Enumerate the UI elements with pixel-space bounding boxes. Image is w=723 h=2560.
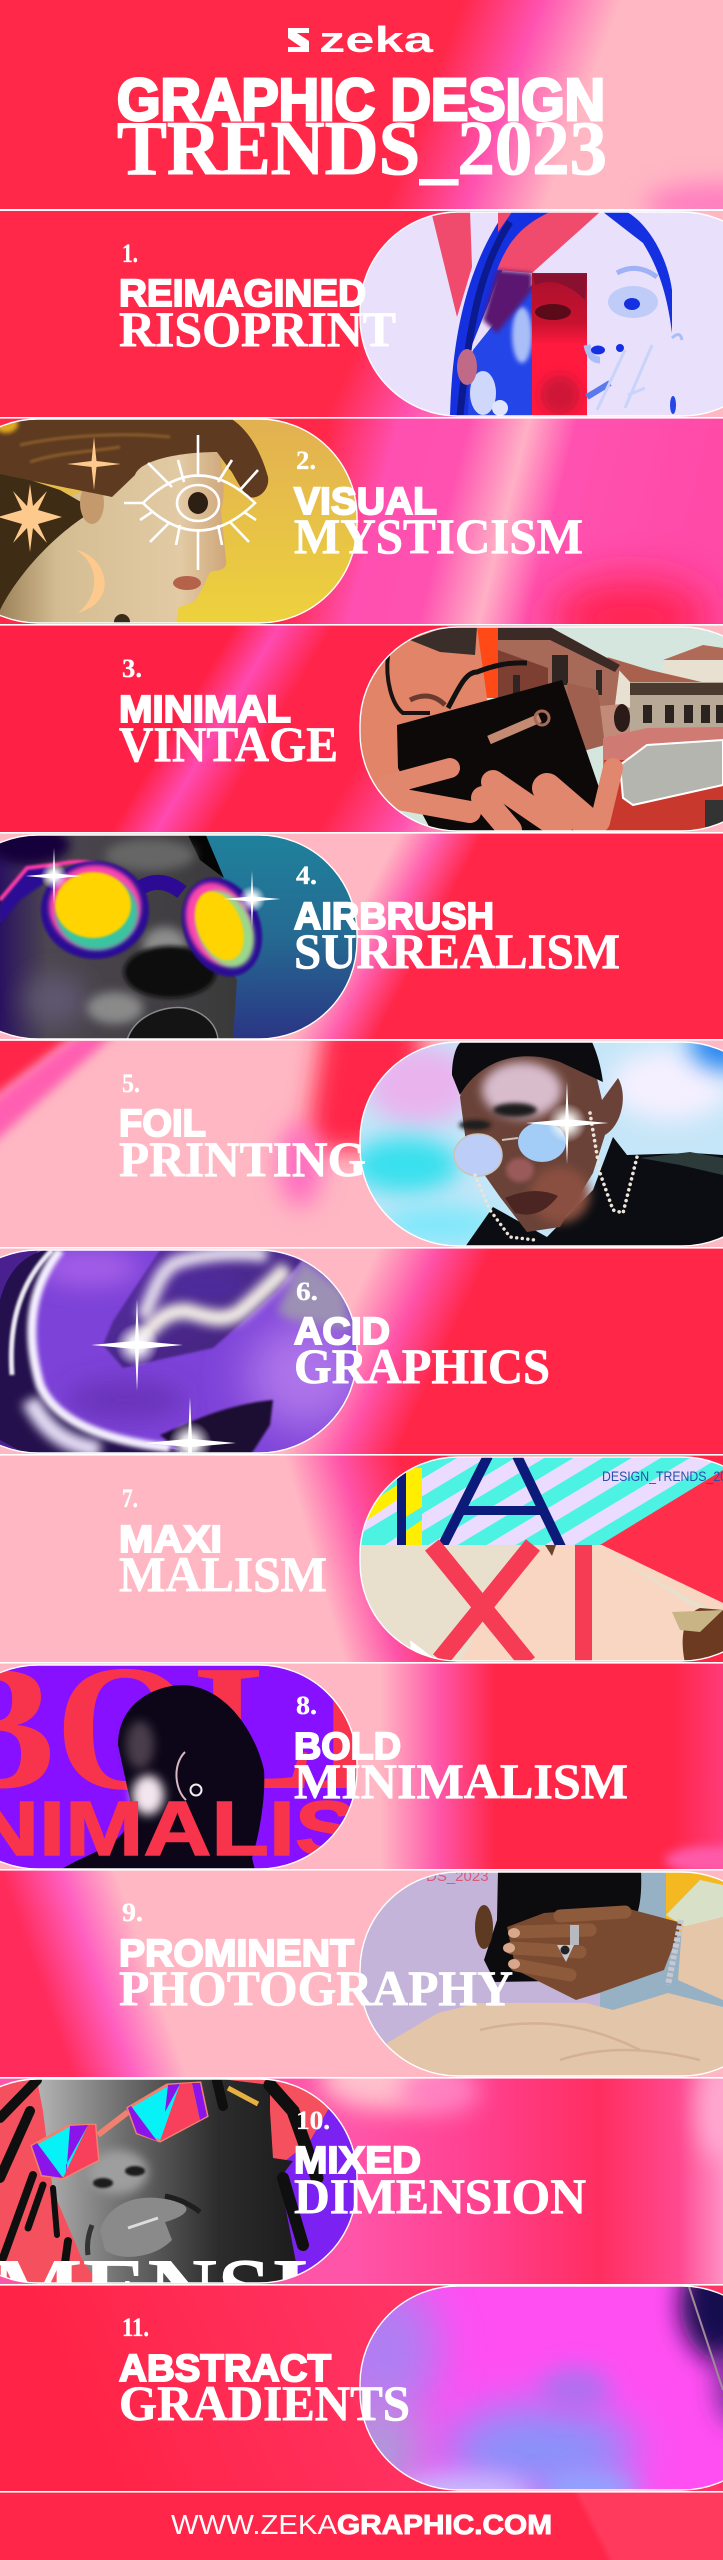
subheading: PRINTING [119,1131,366,1187]
image: hand on neck photograph: DS_2023 [426,1868,489,1885]
panel: trend 7 maximalism [0,1455,723,1663]
panel: trend 5 foil printing [0,1020,723,1248]
number: 1. [122,239,138,268]
heading: AIRBRUSH [294,896,494,938]
heading: PROMINENT [119,1933,354,1975]
panel: trend 6 acid graphics [0,1248,548,1454]
heading: REIMAGINED [119,273,366,315]
subheading: MALISM [119,1546,327,1602]
subheading: PHOTOGRAPHY [119,1960,513,2016]
panel: trend 1 reimagined risoprint [120,211,723,417]
subheading: GRAPHICS [294,1338,550,1394]
heading: FOIL [119,1103,206,1145]
number: 6. [296,1277,318,1306]
image: chrome acid shapes [0,1249,358,1454]
subheading: MINIMALISM [294,1753,628,1809]
number: 10. [296,2106,330,2135]
image: airbrushed sunglasses portrait [0,825,357,1040]
heading: VISUAL [294,481,437,523]
panel: trend 9 prominent photography [0,1868,723,2078]
subheading: RISOPRINT [119,301,396,357]
image: risograph portrait [360,211,723,417]
image: man with vintage camera [360,626,723,834]
number: 7. [122,1484,138,1513]
number: 8. [296,1691,317,1720]
image: abstract gradient mesh [359,2286,723,2491]
subheading: MYSTICISM [294,508,583,564]
heading: BOLD [294,1726,401,1768]
heading: ACID [294,1311,390,1353]
number: 9. [122,1898,143,1927]
image: maximalist poster collage [360,1456,723,1663]
website address: WWW.ZEKA GRAPHIC.COM [171,2509,552,2540]
image: man with foil glasses [359,1041,723,1247]
panel: trend 8 bold minimalism [0,1664,723,1869]
logo: zeka [288,19,434,60]
panel: trend 10 mixed dimension [0,2078,723,2284]
number: 11. [122,2313,149,2342]
subheading: SURREALISM [294,923,620,979]
title [117,67,607,191]
title: GRAPHIC DESIGN [117,67,605,133]
panel: trend 2 visual mysticism [0,418,723,624]
subheading: DIMENSION [294,2168,586,2224]
logo: zeka: zeka [319,19,434,60]
subheading: GRADIENTS [119,2375,410,2431]
number: 4. [296,861,317,890]
panel: trend 4 airbrush surrealism [0,834,619,1039]
subheading: VINTAGE [119,716,338,772]
heading: MAXI [119,1519,222,1561]
panel: trend 3 minimal vintage [116,626,723,832]
footer [0,2492,723,2560]
number: 3. [122,654,142,683]
image: mystic profile portrait [0,415,357,630]
heading: ABSTRACT [119,2348,331,2390]
number: 2. [296,446,316,475]
header panel [118,0,723,209]
image: mixed dimension portrait [0,2078,358,2284]
title: TRENDS_2023 [117,105,607,191]
heading: MIXED [294,2140,421,2182]
panel: trend 11 abstract gradients [118,2286,723,2491]
heading: MINIMAL [119,689,291,731]
image: hand on neck photograph [360,1868,723,2078]
image: bold type portrait [0,1664,358,1869]
number: 5. [122,1069,140,1098]
